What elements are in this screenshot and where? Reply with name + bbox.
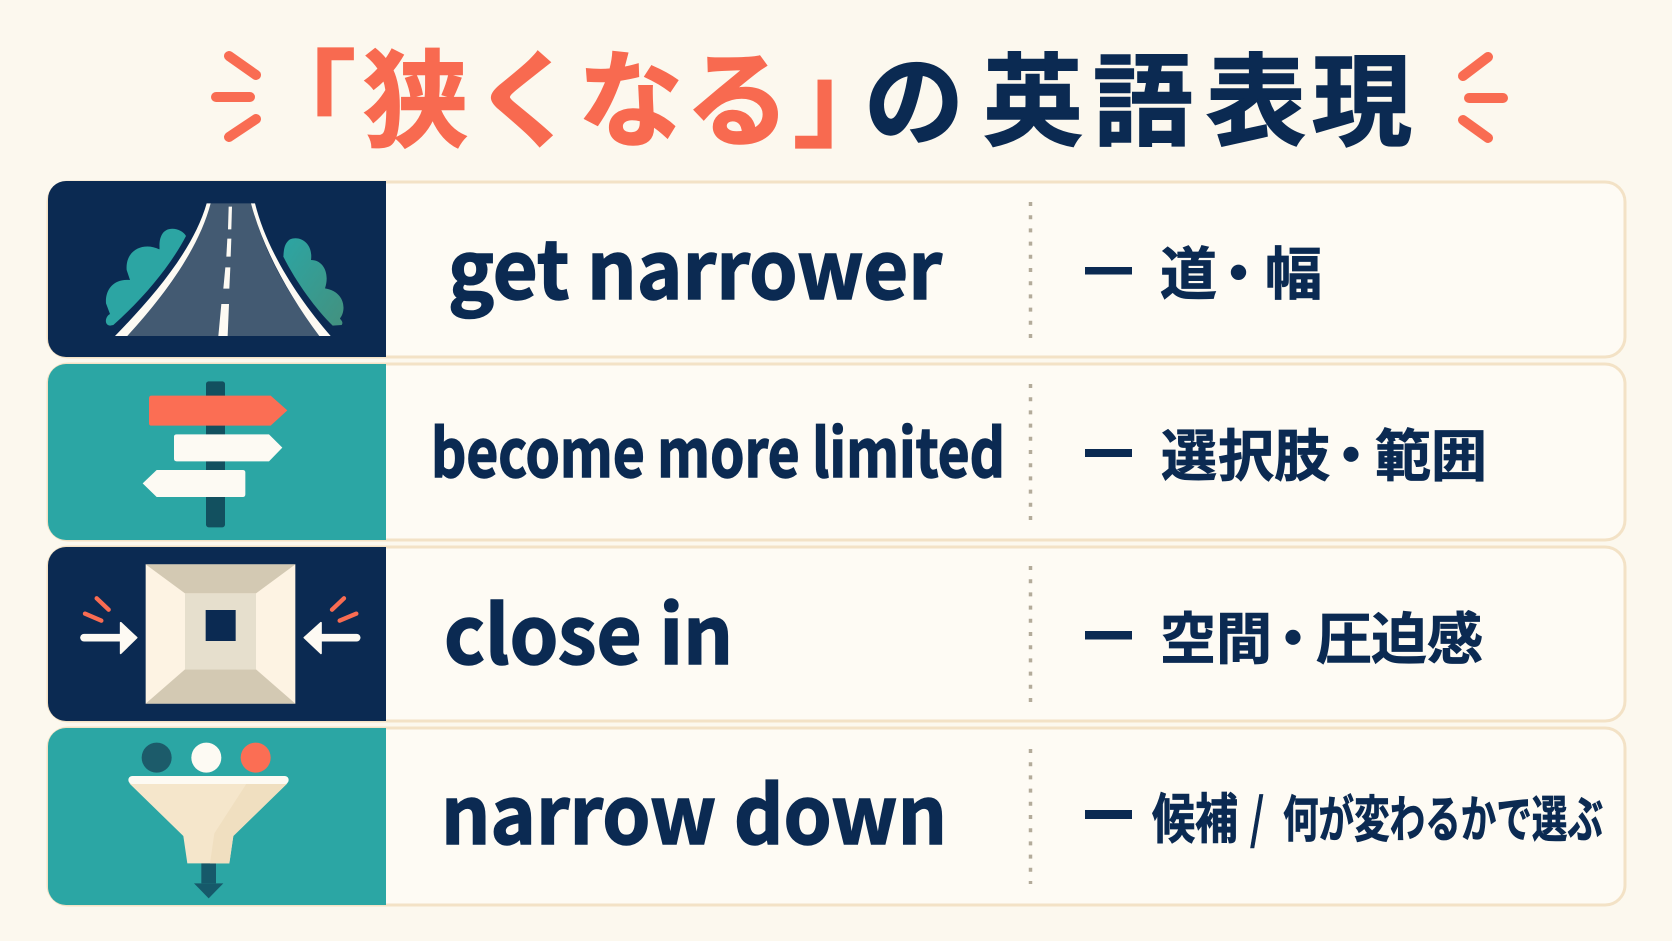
icon panel: signpost: [48, 364, 386, 540]
phrase: narrow down: [441, 752, 947, 868]
row 2: become more limited: [48, 364, 1625, 540]
icon panel: narrowing road: [48, 181, 386, 357]
dash: [1085, 631, 1132, 640]
dash: [1085, 267, 1132, 274]
row 4: narrow down: [48, 728, 1625, 905]
phrase: close in: [444, 572, 733, 688]
meaning: 道・幅: [1160, 229, 1322, 311]
meaning: /: [1250, 775, 1264, 854]
icon panel: closing walls: [48, 547, 386, 721]
title accent: left rays: [216, 56, 256, 137]
phrase: become more limited: [431, 401, 1005, 497]
title: [216, 17, 1503, 169]
dash: [1085, 449, 1132, 457]
title text: navy: の英語表現: [864, 21, 1412, 166]
phrase: get narrower: [448, 207, 942, 323]
title text: coral: 「狭くなる」: [251, 17, 898, 169]
dash: [1085, 810, 1132, 819]
meaning: 選択肢・範囲: [1161, 412, 1487, 493]
icon panel: funnel: [48, 728, 386, 905]
row 1: get narrower: [48, 181, 1625, 357]
title accent: right rays: [1463, 57, 1503, 138]
meaning: 空間・圧迫感: [1160, 595, 1483, 676]
meaning: [1152, 775, 1603, 854]
meaning: 候補: [1152, 775, 1238, 854]
row 3: close in: [48, 547, 1625, 721]
